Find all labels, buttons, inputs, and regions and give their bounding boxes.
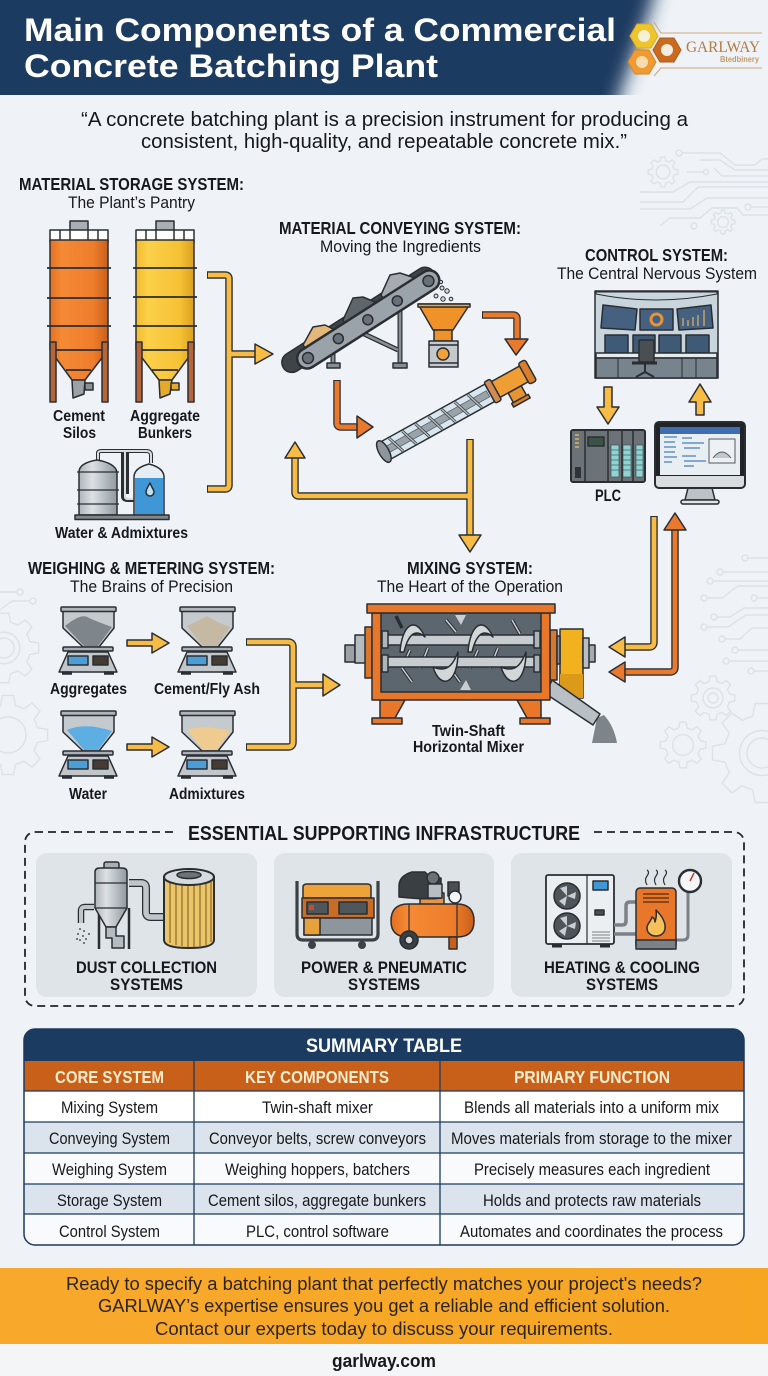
label: power and pneumatic: SYSTEMS — [348, 976, 420, 994]
arrow: control cables to mixer — [609, 513, 686, 682]
row: storage system: Cement silos, aggregate bunkers — [208, 1192, 426, 1210]
label: cement and fly ash: Cement/Fly Ash — [154, 681, 260, 698]
intro quote: consistent, high-quality, and repeatable concrete mix.” — [141, 131, 627, 153]
footer website — [0, 1344, 768, 1376]
icon: control room — [595, 291, 718, 378]
heading: material storage: MATERIAL STORAGE SYSTEM: — [19, 174, 244, 194]
background decoration: gears and circuits — [0, 150, 768, 802]
heading: weighing and metering: WEIGHING & METERING SYSTEM: — [28, 558, 275, 578]
icon: monitor with control software — [655, 422, 745, 504]
card: dust collection — [36, 853, 257, 997]
label: twin-shaft horizontal mixer: Twin-Shaft — [432, 723, 506, 740]
table header row: KEY COMPONENTS — [245, 1067, 389, 1087]
icon: cement scale — [178, 607, 236, 673]
table header row — [24, 1061, 744, 1091]
label: admixtures: Admixtures — [169, 786, 245, 803]
card: heating and cooling — [511, 853, 732, 997]
panel: weighing and metering system — [28, 558, 340, 803]
row: conveying system — [24, 1122, 744, 1153]
icon: aggregate bunker — [133, 221, 197, 402]
label: PLC: PLC — [595, 487, 621, 505]
title: Concrete Batching Plant — [24, 48, 438, 84]
call to action banner: Ready to specify a batching plant that perfectly matches your project's needs? — [66, 1274, 702, 1294]
card: power and pneumatic — [274, 853, 494, 997]
row: control system: PLC, control software — [246, 1223, 389, 1241]
label: cement silos — [53, 408, 106, 442]
label: power and pneumatic: POWER & PNEUMATIC — [301, 959, 467, 977]
label: cement silos: Cement — [53, 408, 106, 425]
icon: screw conveyor — [374, 360, 542, 475]
arrow: control room down to PLC — [597, 387, 619, 424]
heading: control system: CONTROL SYSTEM: — [585, 245, 728, 265]
row: conveying system: Moves materials from storage to the mixer — [451, 1130, 732, 1148]
row: control system — [24, 1214, 744, 1245]
row: mixing system: Twin-shaft mixer — [262, 1099, 373, 1117]
row: mixing system — [24, 1091, 744, 1122]
arrow: monitor up to control room — [689, 384, 711, 415]
arrow: screw to mixer and return — [285, 439, 481, 552]
label: heating and cooling — [544, 959, 700, 994]
icon: boiler with gauge — [614, 870, 701, 949]
call to action banner: GARLWAY’s expertise ensures you get a reliable and efficient solution. — [98, 1296, 670, 1316]
row: storage system: Holds and protects raw materials — [483, 1192, 701, 1210]
row: storage system: Storage System — [57, 1192, 162, 1210]
panel: material conveying system — [278, 218, 542, 552]
logo: GARLWAY — [628, 22, 762, 76]
label: water: Water — [69, 786, 107, 803]
label: cement silos: Silos — [63, 425, 96, 442]
heading: material conveying: Moving the Ingredients — [320, 237, 481, 256]
intro quote — [81, 109, 689, 153]
icon: cement silo — [47, 221, 111, 402]
heading: weighing and metering: The Brains of Precision — [70, 577, 233, 596]
logo: GARLWAY: Btedbinery — [720, 55, 760, 64]
label: power and pneumatic — [301, 959, 467, 994]
header banner — [0, 0, 762, 95]
arrow: water to admixtures — [127, 737, 169, 757]
row: conveying system: Conveyor belts, screw conveyors — [209, 1130, 426, 1148]
label: dust collection — [76, 959, 217, 994]
row: control system: Control System — [59, 1223, 160, 1241]
label: aggregate bunkers — [130, 408, 200, 442]
arrow: weighing to mixer — [246, 642, 340, 747]
panel: essential supporting infrastructure — [25, 822, 744, 1006]
icon: air compressor — [391, 872, 474, 949]
heading: control system — [557, 245, 757, 283]
heading: material storage — [19, 174, 244, 212]
icon: belt conveyor — [278, 263, 453, 376]
panel: control system — [557, 245, 757, 682]
heading: material conveying: MATERIAL CONVEYING SYSTEM: — [279, 218, 521, 238]
row: mixing system: Blends all materials into a uniform mix — [464, 1099, 720, 1117]
heading: mixing system: MIXING SYSTEM: — [407, 558, 533, 578]
intro quote: “A concrete batching plant is a precision instrument for producing a — [81, 109, 689, 131]
arrow: belt to screw — [337, 380, 373, 438]
table title: SUMMARY TABLE — [306, 1036, 462, 1057]
label: water and admixtures: Water & Admixtures — [55, 525, 188, 542]
summary table — [24, 1029, 744, 1245]
row: weighing system: Weighing hoppers, batchers — [225, 1161, 410, 1179]
heading: infrastructure: ESSENTIAL SUPPORTING INFRASTRUCTURE — [188, 822, 580, 845]
row: weighing system: Precisely measures each ingredient — [474, 1161, 710, 1179]
label: heating and cooling: SYSTEMS — [586, 976, 658, 994]
title — [24, 12, 616, 84]
heading: mixing system — [377, 558, 563, 596]
row: control system: Automates and coordinates the process — [460, 1223, 723, 1241]
label: heating and cooling: HEATING & COOLING — [544, 959, 700, 977]
row: mixing system: Mixing System — [61, 1099, 158, 1117]
icon: hopper — [418, 304, 470, 367]
label: aggregate bunkers: Bunkers — [138, 425, 192, 442]
row: conveying system: Conveying System — [49, 1130, 170, 1148]
label: aggregates: Aggregates — [50, 681, 127, 698]
logo: GARLWAY: GARLWAY — [686, 39, 760, 56]
icon: dust collector and filter — [76, 862, 214, 949]
icon: generator — [297, 881, 378, 949]
panel: material storage system — [19, 174, 273, 542]
label: twin-shaft horizontal mixer: Horizontal Mixer — [413, 739, 524, 756]
title: Main Components of a Commercial — [24, 12, 616, 48]
label: dust collection: SYSTEMS — [110, 976, 183, 994]
table header row: CORE SYSTEM — [55, 1067, 164, 1087]
icon: water scale — [59, 711, 117, 777]
row: weighing system — [24, 1153, 744, 1184]
call to action banner — [0, 1268, 768, 1344]
panel: mixing system — [345, 558, 617, 756]
icon: PLC — [571, 430, 645, 482]
icon: chiller unit — [546, 875, 614, 945]
icon: water and admixture tanks — [75, 451, 169, 520]
icon: aggregates scale — [59, 607, 117, 673]
call to action banner: Contact our experts today to discuss your requirements. — [155, 1319, 613, 1339]
table header row: PRIMARY FUNCTION — [514, 1067, 670, 1087]
table title bar — [24, 1029, 744, 1061]
label: twin-shaft horizontal mixer — [413, 723, 524, 756]
row: storage system — [24, 1184, 744, 1214]
arrow: storage to conveying — [207, 275, 273, 489]
icon: twin-shaft mixer — [345, 604, 617, 743]
heading: material conveying — [279, 218, 521, 256]
heading: weighing and metering — [28, 558, 275, 596]
icon: admixtures scale — [178, 711, 236, 777]
label: aggregate bunkers: Aggregate — [130, 408, 200, 425]
arrow: aggregates to cement — [127, 633, 169, 653]
footer website: garlway.com — [332, 1351, 436, 1371]
row: weighing system: Weighing System — [52, 1161, 167, 1179]
arrow: hopper to screw — [482, 315, 528, 355]
heading: mixing system: The Heart of the Operation — [377, 577, 563, 596]
heading: material storage: The Plant’s Pantry — [68, 193, 195, 212]
label: dust collection: DUST COLLECTION — [76, 959, 217, 977]
